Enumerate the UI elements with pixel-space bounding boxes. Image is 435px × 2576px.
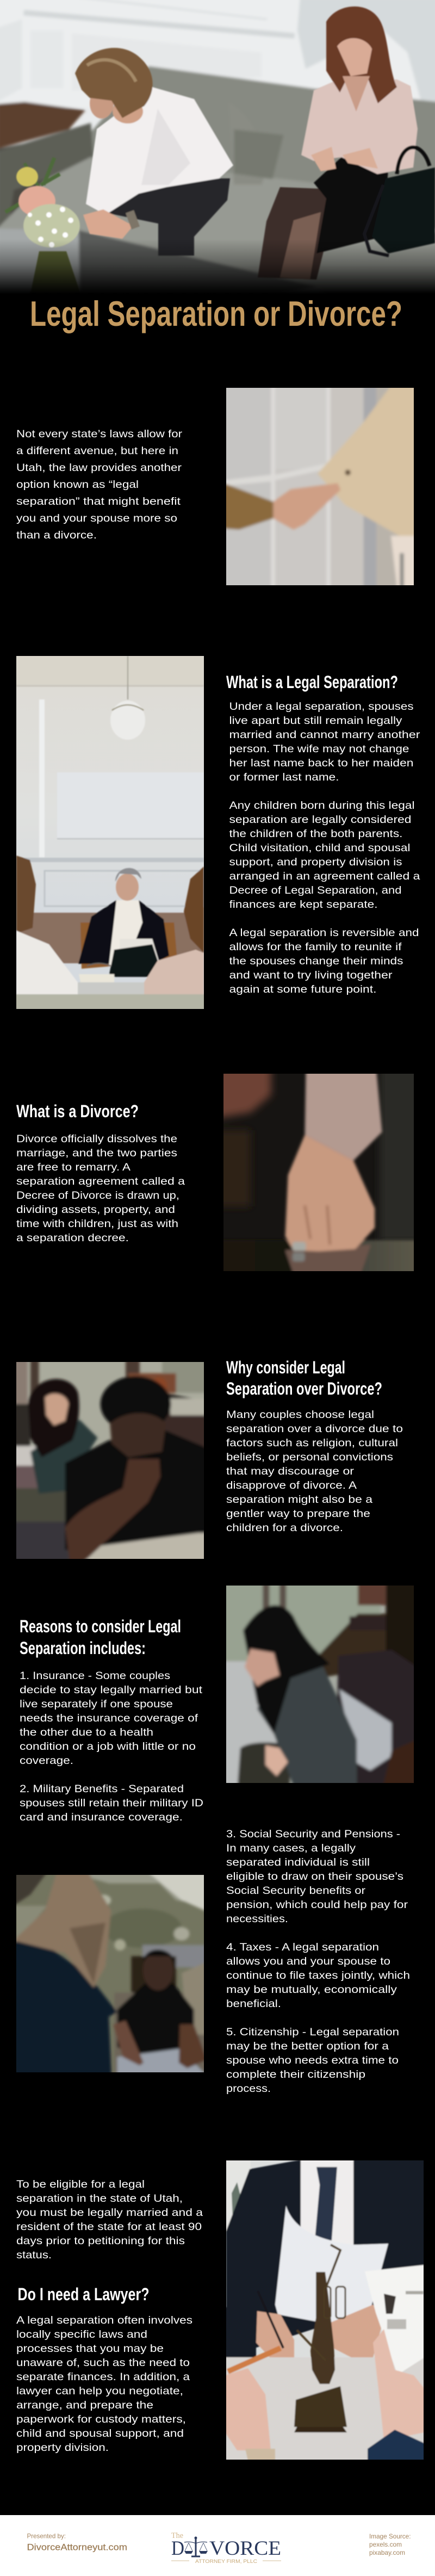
text block: why consider legal separation: separation over a divorce due to <box>226 1423 403 1435</box>
text block: do I need a lawyer: paperwork for custody matters, <box>16 2413 186 2425</box>
text block: what is a legal separation: separation are legally considered <box>229 814 411 826</box>
text block: what is a legal separation: Under a legal separation, spouses <box>229 701 414 713</box>
upper hands <box>256 2311 294 2357</box>
heading: why consider legal separation over divorce: Why consider Legal <box>226 1358 345 1377</box>
text block: what is a legal separation: the spouses change their minds <box>229 955 403 967</box>
text block: eligibility: resident of the state for at least 90 <box>16 2221 202 2233</box>
heading: do I need a lawyer: Do I need a Lawyer? <box>17 2284 149 2304</box>
text block: reasons one and two: the other due to a health <box>20 1726 153 1738</box>
text block: do I need a lawyer: locally specific laws and <box>16 2329 147 2340</box>
logo: the divorce attorney firm: The <box>171 2531 183 2540</box>
raised paper <box>275 2206 388 2325</box>
text block: introduction <box>16 428 183 541</box>
footer band <box>0 2515 435 2576</box>
text block: what is a divorce <box>16 1133 185 1244</box>
statue <box>310 2272 335 2384</box>
text block: what is a divorce: dividing assets, property, and <box>16 1204 175 1216</box>
text block: reasons three, four and five: beneficial. <box>226 1998 281 2010</box>
heading: what is a divorce: What is a Divorce? <box>16 1101 139 1121</box>
text block: eligibility: status. <box>16 2249 52 2261</box>
text block: eligibility: days prior to petitioning for this <box>16 2235 185 2247</box>
text block: what is a legal separation: again at some future point. <box>229 983 376 995</box>
text block: do I need a lawyer: arrange, and prepare the <box>16 2399 153 2411</box>
right paper <box>365 2265 425 2375</box>
text block: what is a legal separation: live apart but still remain legally <box>229 715 402 727</box>
text block: what is a legal separation: arranged in an agreement called a <box>229 870 420 882</box>
photo: mediator seated in white room <box>16 656 204 1009</box>
text block: do I need a lawyer: A legal separation often involves <box>16 2314 192 2326</box>
text block: introduction: separation” that might benefit <box>16 496 181 507</box>
text block: reasons three, four and five: process. <box>226 2083 271 2095</box>
text block: reasons one and two: card and insurance coverage. <box>20 1811 183 1823</box>
text block: what is a legal separation: married and cannot marry another <box>229 729 420 741</box>
photo: two hands letting go <box>226 388 414 585</box>
text block: why consider legal separation: disapprove of divorce. A <box>226 1479 357 1491</box>
text block: reasons one and two: needs the insurance coverage of <box>20 1712 198 1724</box>
text block: what is a legal separation: A legal separation is reversible and <box>229 927 419 939</box>
logo: the divorce attorney firm: VORCE <box>209 2537 281 2560</box>
text block: reasons one and two <box>20 1670 203 1823</box>
text block: reasons three, four and five: 4. Taxes - A legal separation <box>226 1941 379 1953</box>
woman <box>258 187 335 280</box>
text block: what is a legal separation: or former last name. <box>229 771 339 783</box>
text block: introduction: than a divorce. <box>16 529 97 541</box>
text block: introduction: Utah, the law provides another <box>16 462 182 474</box>
text block: reasons three, four and five: spouse who needs extra time to <box>226 2054 399 2066</box>
text block: what is a divorce: Divorce officially dissolves the <box>16 1133 177 1145</box>
text block: reasons one and two: spouses still retain their military ID <box>20 1797 203 1809</box>
text block: eligibility <box>16 2178 203 2261</box>
lower hands <box>225 2368 271 2450</box>
text block: reasons one and two: 1. Insurance - Some couples <box>20 1670 170 1682</box>
text block: what is a legal separation: Decree of Legal Separation, and <box>229 884 401 896</box>
text block: what is a legal separation: person. The wife may not change <box>229 743 409 755</box>
text block: what is a divorce: separation agreement called a <box>16 1175 185 1187</box>
text block: reasons three, four and five: separated individual is still <box>226 1856 370 1868</box>
text block: what is a legal separation <box>229 701 420 995</box>
text block: why consider legal separation: beliefs, or personal convictions <box>226 1451 393 1463</box>
text block: do I need a lawyer <box>16 2314 192 2454</box>
icon: scales of justice <box>184 2537 208 2556</box>
text block: reasons one and two: 2. Military Benefits - Separated <box>20 1783 184 1795</box>
text block: what is a legal separation: Any children born during this legal <box>229 800 414 812</box>
text block: reasons three, four and five: In many cases, a legally <box>226 1842 356 1854</box>
photo: woman walking away from kneeling man <box>16 1875 204 2072</box>
image source credit: pixabay.com <box>369 2549 405 2556</box>
heading: reasons to consider legal separation: Reasons to consider Legal <box>20 1617 181 1636</box>
photo: hand removing a wedding ring <box>223 1074 414 1271</box>
vase and flowers <box>30 251 80 294</box>
presented by credit: DivorceAttorneyut.com <box>27 2542 127 2552</box>
logo: the divorce attorney firm <box>171 2531 281 2565</box>
image source credit <box>369 2532 411 2556</box>
text block: what is a divorce: marriage, and the two parties <box>16 1147 177 1159</box>
text block: reasons three, four and five: complete their citizenship <box>226 2069 365 2080</box>
handbag <box>372 168 435 253</box>
text block: what is a divorce: time with children, just as with <box>16 1218 178 1230</box>
text block: what is a legal separation: Child visitation, child and spousal <box>229 842 410 854</box>
photo: upset couple beside a car <box>16 1362 204 1559</box>
heading: why consider legal separation over divorce <box>226 1358 382 1398</box>
logo: the divorce attorney firm: ATTORNEY FIRM, PLLC <box>195 2559 257 2565</box>
text block: eligibility: separation in the state of Utah, <box>16 2193 183 2205</box>
text block: introduction: Not every state’s laws allow for <box>16 428 183 440</box>
text block: do I need a lawyer: child and spousal support, and <box>16 2428 184 2439</box>
hero photo: couple on a sofa <box>0 0 435 292</box>
heading: reasons to consider legal separation <box>20 1617 181 1658</box>
heading: why consider legal separation over divorce: Separation over Divorce? <box>226 1379 382 1398</box>
text block: reasons one and two: coverage. <box>20 1755 73 1767</box>
text block: reasons three, four and five: Social Security benefits or <box>226 1885 366 1897</box>
text block: why consider legal separation <box>226 1409 403 1534</box>
text block: do I need a lawyer: separate finances. In addition, a <box>16 2371 190 2383</box>
image source credit: Image Source: <box>369 2532 411 2540</box>
text block: do I need a lawyer: property division. <box>16 2442 109 2454</box>
text block: introduction: option known as “legal <box>16 479 139 491</box>
text block: reasons three, four and five: 3. Social Security and Pensions - <box>226 1828 400 1840</box>
text block: eligibility: To be eligible for a legal <box>16 2178 145 2190</box>
text block: introduction: you and your spouse more so <box>16 512 177 524</box>
presented by credit <box>27 2532 127 2552</box>
text block: why consider legal separation: factors such as religion, cultural <box>226 1437 398 1449</box>
text block: why consider legal separation: that may discourage or <box>226 1465 355 1477</box>
text block: reasons one and two: live separately if one spouse <box>20 1698 173 1710</box>
text block: what is a legal separation: and want to try living together <box>229 969 393 981</box>
photo: distressed woman holding her head <box>226 1586 414 1783</box>
logo: the divorce attorney firm: D <box>171 2537 184 2560</box>
text block: what is a divorce: are free to remarry. A <box>16 1161 130 1173</box>
text block: reasons three, four and five: necessities. <box>226 1913 288 1925</box>
text block: reasons three, four and five: pension, which could help pay for <box>226 1899 408 1911</box>
text block: introduction: a different avenue, but here in <box>16 445 178 457</box>
text block: reasons three, four and five <box>226 1828 410 2095</box>
chair <box>80 922 177 969</box>
text block: what is a divorce: Decree of Divorce is drawn up, <box>16 1190 179 1202</box>
text block: what is a divorce: a separation decree. <box>16 1232 129 1244</box>
image source credit: pexels.com <box>369 2541 402 2548</box>
text block: reasons three, four and five: eligible to draw on their spouse’s <box>226 1871 403 1883</box>
text block: what is a legal separation: allows for the family to reunite if <box>229 941 402 953</box>
text block: why consider legal separation: children for a divorce. <box>226 1522 343 1534</box>
text block: eligibility: you must be legally married and a <box>16 2207 203 2219</box>
text block: reasons three, four and five: may be mutually, economically <box>226 1984 397 1996</box>
text block: do I need a lawyer: lawyer can help you negotiate, <box>16 2385 183 2397</box>
text block: do I need a lawyer: unaware of, such as the need to <box>16 2357 190 2369</box>
text block: reasons one and two: condition or a job with little or no <box>20 1741 196 1753</box>
presented by credit: Presented by: <box>27 2532 66 2540</box>
text block: what is a legal separation: finances are kept separate. <box>229 899 377 911</box>
text block: what is a legal separation: her last name back to her maiden <box>229 757 413 769</box>
text block: what is a legal separation: support, and property division is <box>229 856 402 868</box>
text block: reasons three, four and five: 5. Citizenship - Legal separation <box>226 2026 399 2038</box>
text block: reasons one and two: decide to stay legally married but <box>20 1684 203 1696</box>
text block: reasons three, four and five: continue to file taxes jointly, which <box>226 1970 410 1981</box>
photo: lawyer with documents and lady justice statue <box>226 2160 424 2460</box>
man <box>105 178 230 256</box>
text block: why consider legal separation: gentler way to prepare the <box>226 1508 370 1520</box>
foreground <box>16 856 36 933</box>
text block: why consider legal separation: Many couples choose legal <box>226 1409 374 1421</box>
text block: reasons three, four and five: allows you and your spouse to <box>226 1955 390 1967</box>
text block: what is a legal separation: the children of the both parents. <box>229 828 402 840</box>
seated woman <box>78 900 169 964</box>
text block: reasons three, four and five: may be the better option for a <box>226 2040 389 2052</box>
heading: reasons to consider legal separation: Separation includes: <box>20 1638 146 1658</box>
text block: why consider legal separation: separation might also be a <box>226 1494 372 1506</box>
text block: do I need a lawyer: processes that you may be <box>16 2343 164 2355</box>
